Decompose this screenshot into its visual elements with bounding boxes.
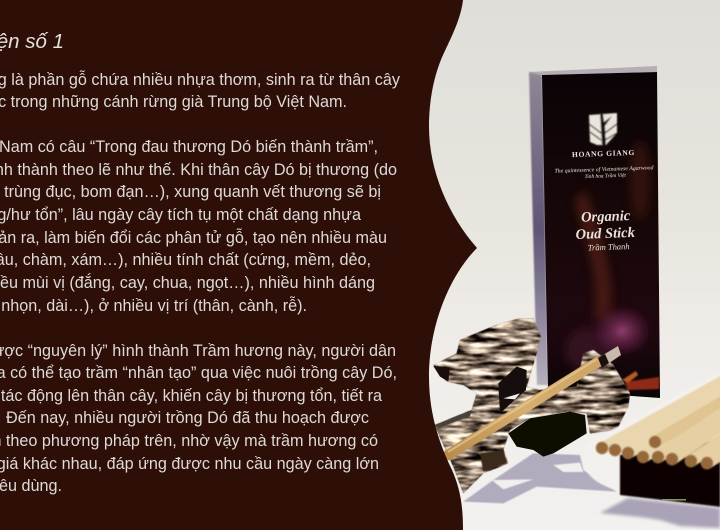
agarwood chunk xyxy=(433,318,630,493)
incense stick xyxy=(448,346,621,455)
stick end caps xyxy=(596,436,713,469)
box streak decoration xyxy=(565,140,650,372)
box brand text: Trầm Thanh xyxy=(588,241,630,253)
white paper wrap xyxy=(584,372,720,492)
box side face xyxy=(529,72,548,385)
thin dark branch xyxy=(435,410,472,427)
photo background xyxy=(400,0,720,530)
box brand text: Organic xyxy=(581,208,631,226)
paragraph 1 xyxy=(0,70,400,111)
black stick tray xyxy=(620,440,720,507)
paragraph 3 xyxy=(0,342,397,495)
box top face xyxy=(529,66,657,75)
paragraph 3: ta có thể tạo trầm “nhân tạo” qua việc nuôi trồng cây Dó, xyxy=(0,364,397,382)
stick ash tip xyxy=(598,346,621,368)
lower dark patch xyxy=(480,450,507,472)
rear sticks xyxy=(603,372,720,457)
box brand text: HOANG GIANG xyxy=(572,148,635,159)
floor light patches xyxy=(492,479,533,489)
incense box xyxy=(529,66,660,398)
box brand text: The quintessence of Vietnamese Agarwood xyxy=(554,164,654,175)
floor shadow xyxy=(463,453,617,503)
orange detail xyxy=(622,371,638,383)
box brand text: Tinh hoa Trầm Việt xyxy=(584,172,627,180)
mid stick xyxy=(655,392,720,442)
tray shadow xyxy=(600,498,720,528)
logo tree xyxy=(589,113,617,146)
front sticks xyxy=(658,402,720,463)
wood dark cavity xyxy=(498,367,527,413)
tray label mark xyxy=(662,499,686,500)
wood left dark tip xyxy=(433,366,450,382)
small light gap xyxy=(503,393,520,399)
red strip xyxy=(625,377,659,390)
box front face xyxy=(542,72,660,398)
story text block xyxy=(0,70,400,495)
box brand text xyxy=(554,147,656,254)
bundle of sticks xyxy=(596,372,720,469)
smoke glow xyxy=(590,303,654,359)
wood arch hole xyxy=(508,412,587,457)
box brand text: Oud Stick xyxy=(575,225,636,243)
dark gap behind front sticks xyxy=(664,412,720,450)
paragraph 2 xyxy=(0,138,397,315)
